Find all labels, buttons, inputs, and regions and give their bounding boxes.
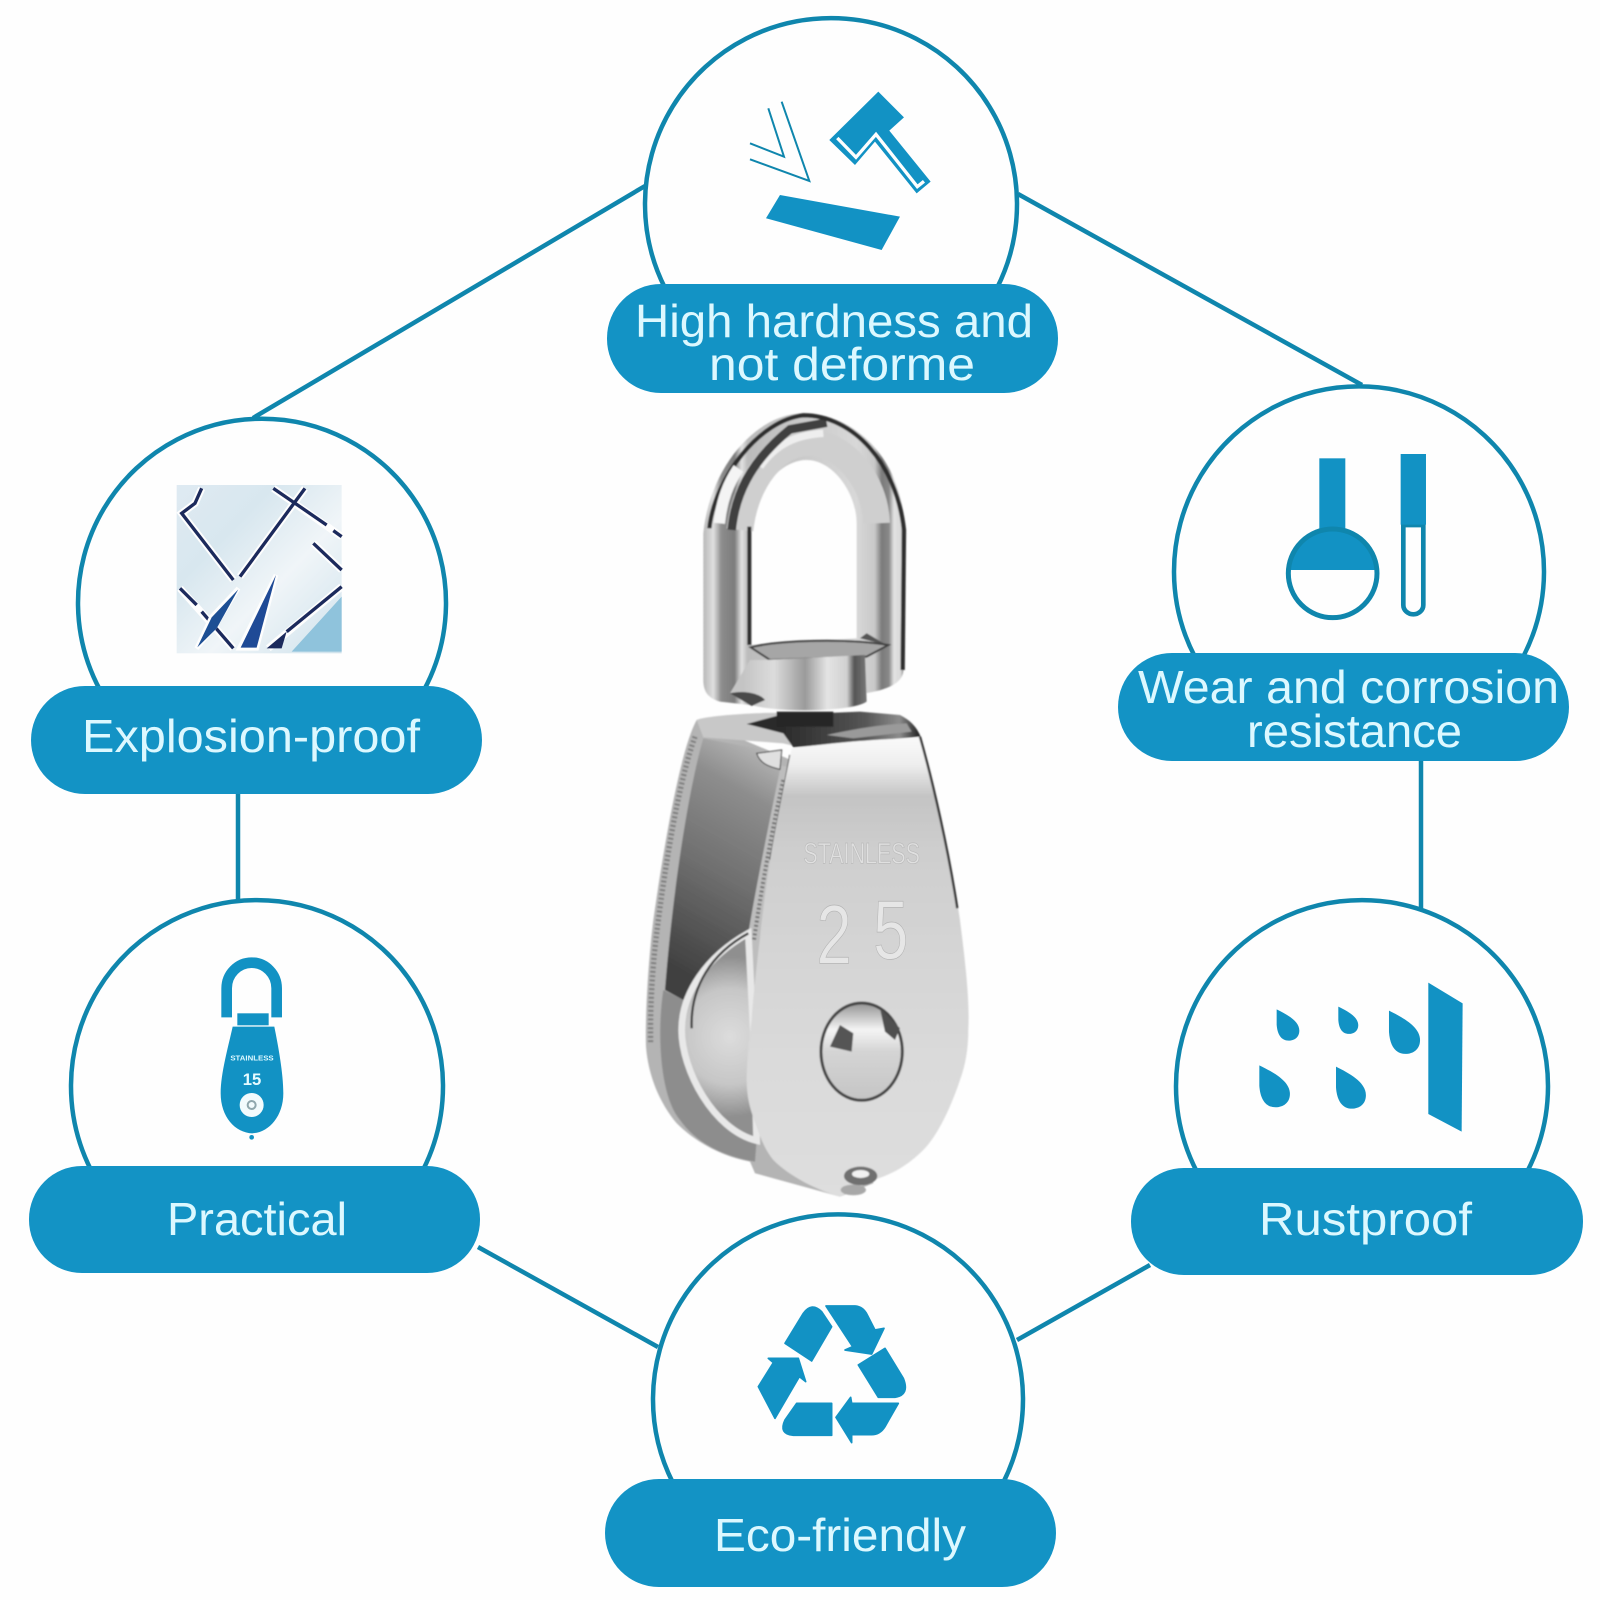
serrated inner edge: [748, 767, 787, 1020]
product photo: stainless swivel pulley: [646, 413, 969, 1197]
connector: lower right to bottom: [1017, 1265, 1150, 1340]
stamped digit 5: 5: [873, 883, 908, 976]
circle outline: [78, 419, 446, 690]
label text: High hardness and: [635, 295, 1033, 347]
label text second line: resistance: [1247, 705, 1462, 757]
connector: top to upper left: [253, 186, 645, 418]
connector: upper right to lower right: [1419, 761, 1423, 908]
label pill: [29, 1166, 480, 1273]
sheave wheel: [682, 933, 757, 1141]
collar top surface: [751, 641, 888, 660]
circle outline: [71, 900, 443, 1170]
connector: top to upper right: [1018, 194, 1362, 385]
spindle neck: [777, 712, 833, 727]
panel: eco-friendly: [605, 1214, 1056, 1587]
label pill: [605, 1479, 1056, 1587]
collar band: [730, 655, 867, 710]
label pill: [31, 686, 482, 794]
serrated left edge: [651, 737, 695, 1043]
ring dark bands: [732, 423, 827, 530]
connector: upper left to lower left: [236, 794, 240, 900]
stamped digit 2: 2: [817, 888, 852, 981]
ring highlight arc: [740, 443, 877, 530]
panel: explosion-proof: [31, 419, 482, 794]
icon: recycling arrows: [758, 1306, 905, 1443]
label text: Explosion-proof: [82, 710, 420, 762]
icon: water drops and wall: [1259, 983, 1463, 1132]
circle outline: [653, 1214, 1023, 1483]
label text: Eco-friendly: [714, 1509, 966, 1561]
label text: Wear and corrosion: [1138, 661, 1559, 713]
back plate: [646, 720, 873, 1197]
center rivet: [821, 1003, 902, 1100]
swivel ring: [703, 413, 905, 710]
panel: high hardness: [607, 18, 1058, 393]
connector: lower left to bottom: [478, 1247, 658, 1347]
panel: practical: [29, 900, 480, 1273]
circle outline: [645, 18, 1017, 288]
icon: shattered glass: [177, 485, 342, 653]
lower back shading: [660, 990, 757, 1162]
circle outline: [1174, 386, 1544, 657]
pulley body: [646, 712, 969, 1197]
circle outline: [1176, 900, 1548, 1172]
inner dark pane: [665, 738, 783, 1000]
label text: Practical: [167, 1193, 347, 1245]
panel: rustproof: [1131, 900, 1583, 1275]
plate right dark edge: [920, 737, 957, 908]
inner tab: [757, 750, 782, 769]
panel: wear and corrosion resistance: [1118, 386, 1569, 761]
icon: small pulley: [221, 963, 283, 1140]
front plate: [747, 737, 969, 1197]
label pill: [1131, 1168, 1583, 1275]
label text second line: not deforme: [709, 338, 975, 390]
label pill: [607, 284, 1058, 393]
embossed text: [803, 837, 920, 981]
icon: hammer and plate: [750, 92, 931, 250]
icon: small pulley: STAINLESS: [230, 1054, 274, 1063]
bottom rivet: [844, 1167, 877, 1185]
icon: flask and test tube: [1288, 454, 1426, 618]
top band: [697, 713, 797, 747]
icon: small pulley: 15: [243, 1070, 261, 1089]
label text: Rustproof: [1259, 1193, 1472, 1245]
stamped word: STAINLESS: [803, 837, 920, 870]
ring shape: [703, 413, 905, 708]
label pill: [1118, 653, 1569, 761]
